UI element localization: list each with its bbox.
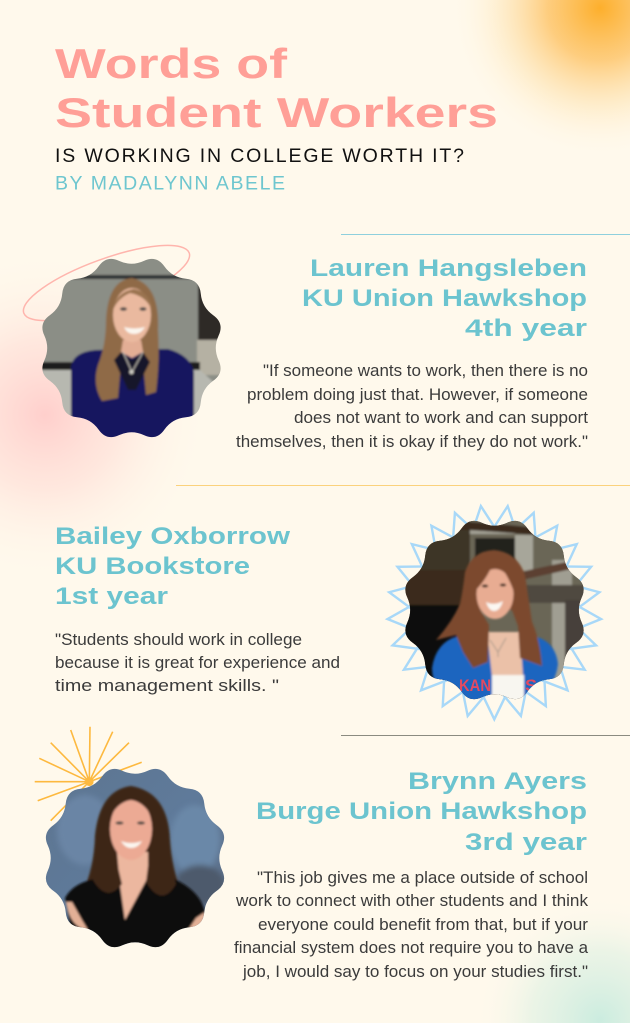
quote: because it is great for experience and — [55, 654, 340, 672]
jacket lettering — [460, 680, 536, 691]
quote — [236, 362, 588, 451]
panel: Lauren Hangsleben — [16, 230, 588, 451]
quote: everyone could benefit from that, but if your — [258, 916, 589, 934]
panel: Brynn Ayers — [35, 727, 589, 981]
blob base fill — [405, 521, 584, 699]
quote: "If someone wants to work, then there is no — [263, 362, 588, 380]
photo: Lauren — [42, 258, 221, 438]
name and workplace: Bailey Oxborrow — [55, 523, 290, 550]
name and workplace — [256, 768, 587, 856]
sunburst — [35, 727, 142, 821]
quote — [55, 631, 340, 695]
name and workplace: 1st year — [55, 583, 168, 610]
name and workplace: KU Union Hawkshop — [302, 285, 587, 312]
quote: job, I would say to focus on your studies first." — [242, 963, 588, 981]
orange glow top right — [450, 0, 630, 158]
photo: Brynn — [46, 768, 224, 948]
title: Words of — [55, 40, 288, 87]
title: Student Workers — [55, 89, 498, 136]
name and workplace — [302, 255, 587, 342]
quote: time management skills. " — [55, 677, 279, 695]
quote: "Students should work in college — [55, 631, 302, 649]
title — [55, 40, 498, 136]
quote: does not want to work and can support — [294, 409, 588, 427]
panel: Bailey Oxborrow — [55, 505, 602, 719]
name and workplace: Burge Union Hawkshop — [256, 798, 587, 825]
photo: Bailey — [405, 520, 584, 700]
name and workplace: KU Bookstore — [55, 553, 250, 580]
quote: themselves, then it is okay if they do not work." — [236, 433, 588, 451]
quote — [234, 869, 589, 981]
quote: problem doing just that. However, if someone — [247, 386, 588, 404]
teal glow bottom right — [475, 895, 630, 1023]
jacket lettering: S — [525, 677, 537, 695]
quote: work to connect with other students and I think — [235, 892, 589, 910]
quote: "This job gives me a place outside of school — [257, 869, 588, 887]
halo ring — [16, 230, 197, 336]
name and workplace: Brynn Ayers — [408, 768, 587, 795]
quote: financial system does not require you to have a — [234, 939, 589, 957]
name and workplace — [55, 523, 290, 610]
subtitle: IS WORKING IN COLLEGE WORTH IT? — [55, 145, 464, 167]
name and workplace: Lauren Hangsleben — [310, 255, 587, 282]
jacket lettering: KAN — [459, 677, 491, 695]
name and workplace: 4th year — [465, 315, 587, 342]
byline: BY MADALYNN ABELE — [55, 172, 285, 194]
name and workplace: 3rd year — [465, 829, 587, 856]
pink glow left — [0, 250, 210, 580]
star outline — [387, 505, 602, 719]
